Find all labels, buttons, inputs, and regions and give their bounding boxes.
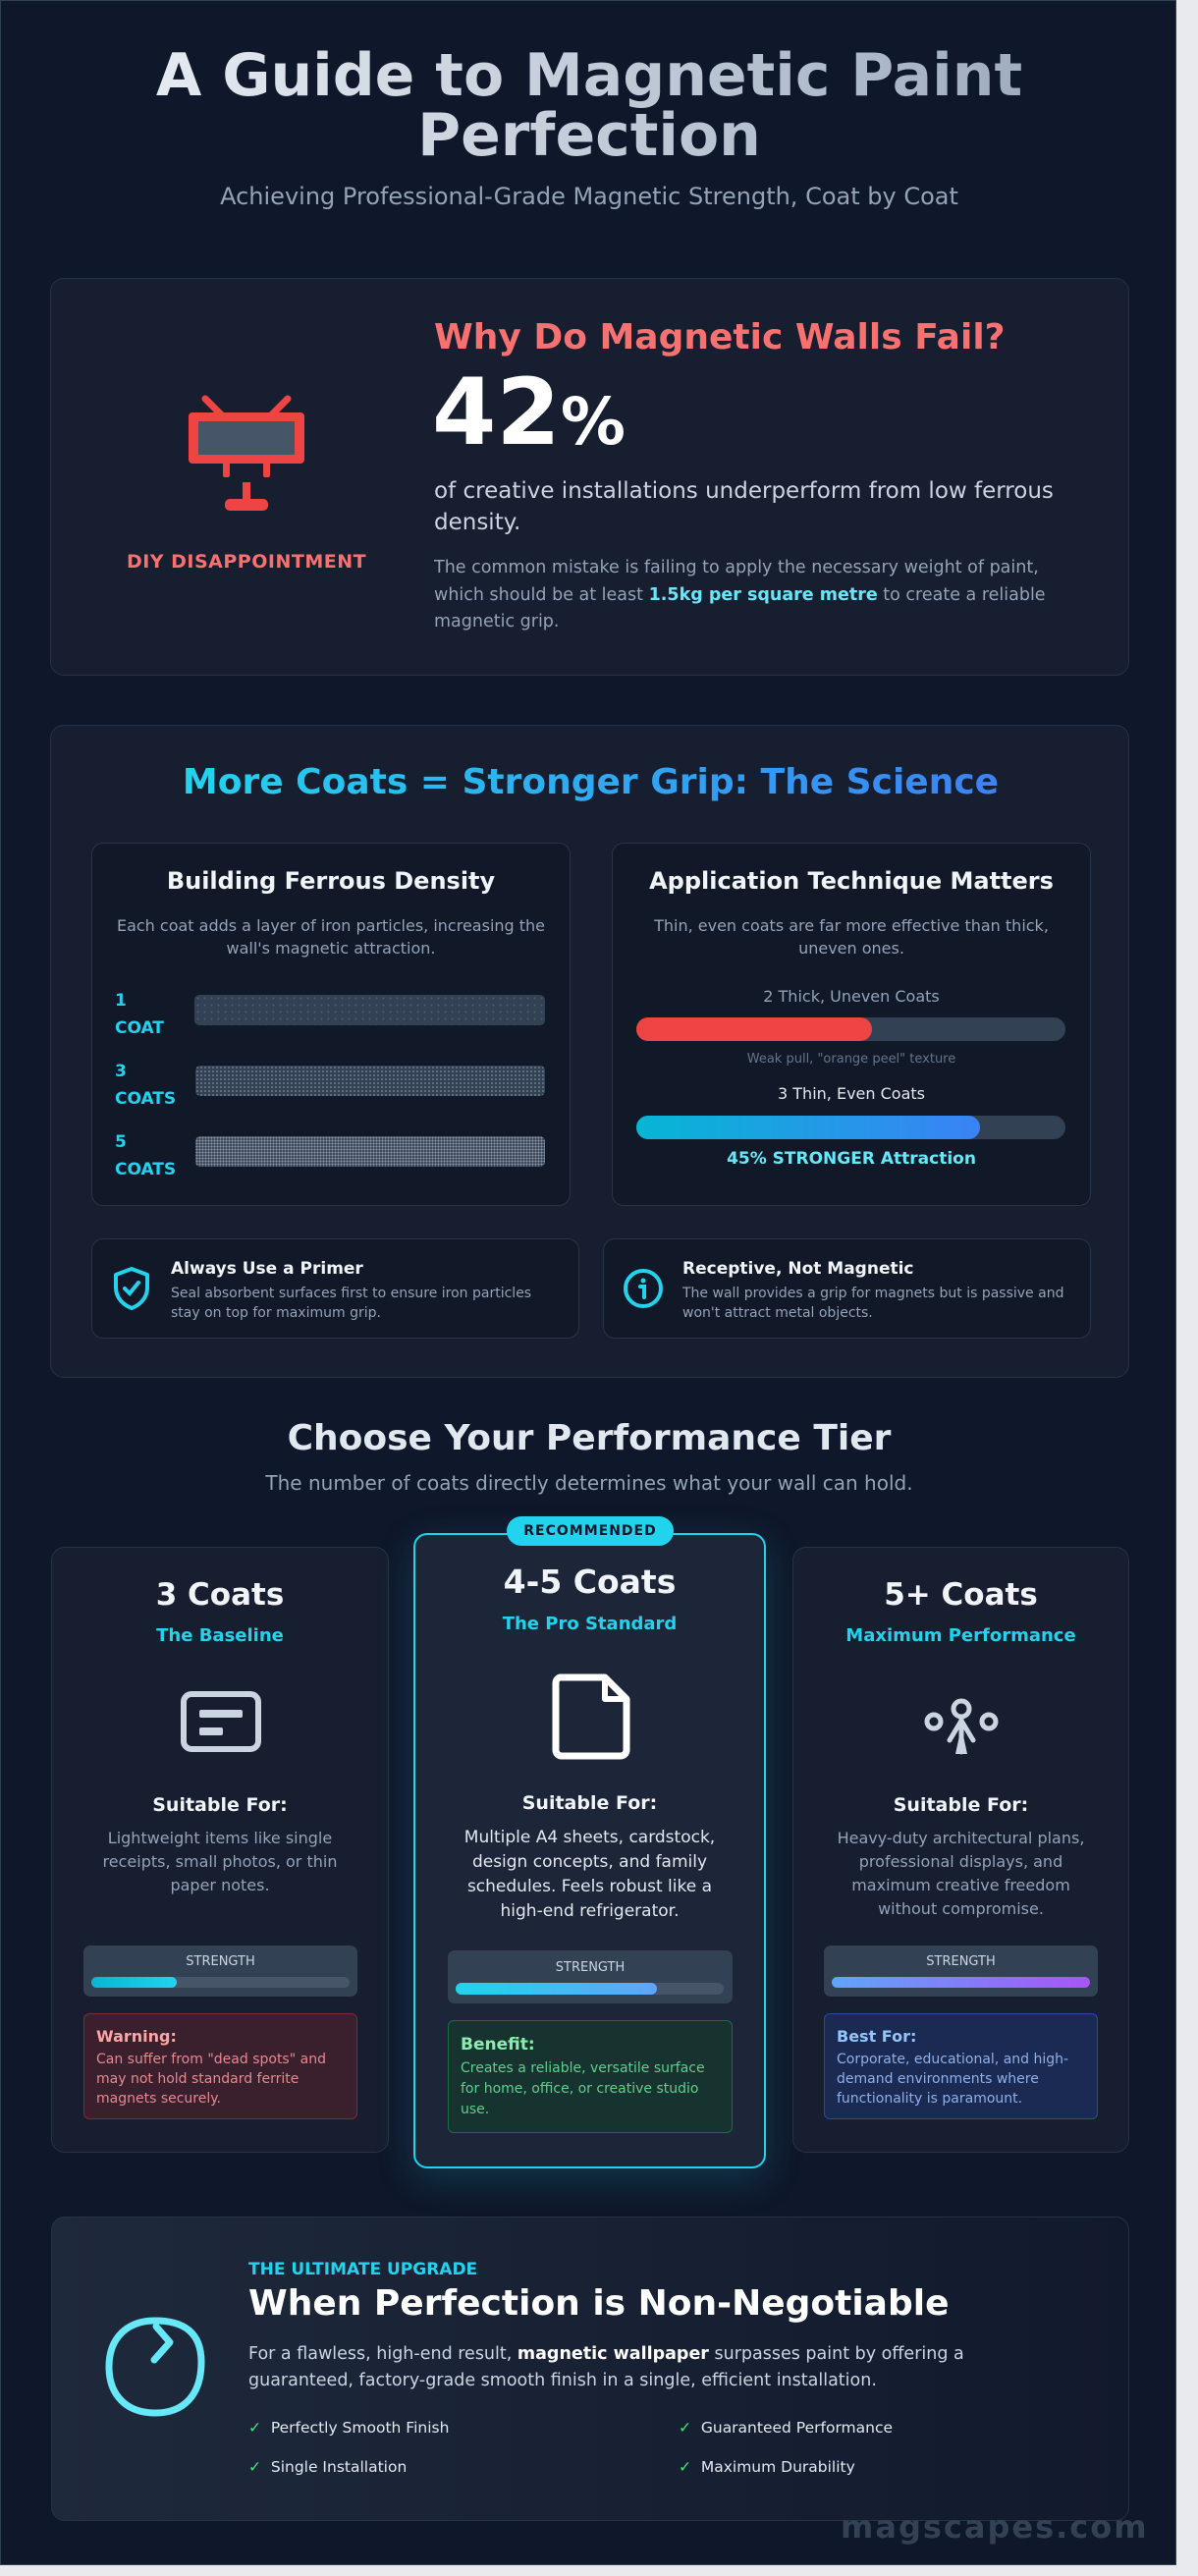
tier card: 3 coats: Lightweight items like single receipts, small photos, or thin paper notes. <box>103 1829 337 1894</box>
card: application technique: Application Technique Matters <box>649 867 1054 895</box>
tier card: 5+ coats: Maximum Performance <box>845 1625 1076 1646</box>
icon: network <box>925 1699 998 1754</box>
icon: timer <box>106 2318 204 2416</box>
row 5 coats: 5 <box>115 1132 127 1152</box>
strength meter <box>824 1946 1098 1997</box>
icon: document <box>552 1673 630 1760</box>
strength meter <box>83 1946 357 1997</box>
tier card: 4-5 coats recommended: Suitable For: <box>522 1792 657 1814</box>
card: building ferrous density: Each coat adds a layer of iron particles, increasing the wall's magnetic attraction. <box>117 916 545 958</box>
tip: primer: Always Use a Primer <box>171 1259 363 1279</box>
tip: primer <box>91 1238 579 1339</box>
icon: broken screen <box>189 395 304 511</box>
subtitle: Achieving Professional-Grade Magnetic Strength, Coat by Coat <box>220 183 958 210</box>
title <box>1 46 1177 166</box>
panel: science <box>50 725 1129 1378</box>
checklist: ✓ Guaranteed Performance <box>679 2419 893 2437</box>
watermark: magscapes.com <box>841 2508 1149 2546</box>
badge: recommended <box>507 1516 674 1546</box>
card: application technique <box>612 843 1091 1206</box>
heading: Why Do Magnetic Walls Fail? <box>434 317 1006 357</box>
benefit box <box>448 2020 733 2133</box>
benefit box: Creates a reliable, versatile surface for home, office, or creative studio use. <box>461 2060 705 2117</box>
row 3 coats <box>115 1062 545 1109</box>
icon: card <box>181 1691 261 1752</box>
panel: why walls fail <box>50 278 1129 676</box>
tier card: 4-5 coats recommended: 4-5 Coats <box>504 1562 676 1601</box>
panel: ultimate upgrade: THE ULTIMATE UPGRADE <box>248 2260 477 2279</box>
best for box <box>824 2013 1098 2119</box>
checklist <box>248 2419 893 2476</box>
benefit box: Benefit: <box>461 2035 535 2055</box>
tier card: 4-5 coats recommended: Multiple A4 sheets, cardstock, design concepts, and family schedules. Feels robust like a high-end refrigerator. <box>464 1828 715 1921</box>
tier card: 3 coats: Suitable For: <box>152 1794 288 1816</box>
stat 42%: 42% <box>432 359 626 466</box>
row 3 coats: 3 <box>115 1062 127 1081</box>
card: application technique: Weak pull, "orange peel" texture <box>747 1052 955 1067</box>
thin coats bar: 3 Thin, Even Coats <box>778 1084 925 1103</box>
thick coats bar: 2 Thick, Uneven Coats <box>763 987 940 1006</box>
best for box: Best For: <box>837 2027 916 2046</box>
row 5 coats <box>115 1132 545 1179</box>
checklist: ✓ Maximum Durability <box>679 2458 855 2476</box>
card: building ferrous density: COATS <box>115 1089 176 1109</box>
strength meter <box>448 1950 733 2003</box>
strength meter: STRENGTH <box>556 1960 625 1975</box>
tip: receptive: The wall provides a grip for magnets but is passive and won't attract metal objects. <box>682 1286 1063 1321</box>
tier card: 4-5 coats recommended <box>413 1533 766 2168</box>
card: building ferrous density <box>91 843 571 1206</box>
row 1 coat <box>115 991 545 1038</box>
best for box: Corporate, educational, and high-demand environments where functionality is paramount. <box>837 2052 1068 2107</box>
card: application technique: Thin, even coats are far more effective than thick, uneven ones. <box>654 916 1049 958</box>
heading: More Coats = Stronger Grip: The Science <box>183 762 999 802</box>
tier card: 3 coats: The Baseline <box>156 1625 284 1646</box>
row 1 coat: 1 <box>115 991 127 1011</box>
strength meter: STRENGTH <box>926 1954 996 1969</box>
warning box <box>83 2013 357 2119</box>
checklist: ✓ Perfectly Smooth Finish <box>248 2419 449 2437</box>
panel: ultimate upgrade: For a flawless, high-end result, magnetic wallpaper surpasses paint by offering a guaranteed, factory-grade smooth finish in a single, efficient installation. <box>248 2344 964 2390</box>
panel: ultimate upgrade <box>51 2217 1129 2521</box>
tier card: 5+ coats: Heavy-duty architectural plans, professional displays, and maximum creative freedom without compromise. <box>838 1829 1084 1918</box>
title: Perfection <box>417 101 761 170</box>
card: building ferrous density: COATS <box>115 1160 176 1179</box>
card: building ferrous density: COAT <box>115 1018 164 1038</box>
strength meter: STRENGTH <box>186 1954 255 1969</box>
tip: receptive: Receptive, Not Magnetic <box>682 1259 914 1279</box>
tier card: 3 coats <box>51 1547 389 2153</box>
warning box: Warning: <box>96 2027 177 2046</box>
tip: receptive <box>603 1238 1091 1339</box>
tier card: 4-5 coats recommended: The Pro Standard <box>503 1614 677 1634</box>
explanation: The common mistake is failing to apply the necessary weight of paint, which should be at least 1.5kg per square metre to create a reliable magnetic grip. <box>434 558 1046 631</box>
section subtitle: The number of coats directly determines what your wall can hold. <box>265 1471 913 1495</box>
warning box: Can suffer from "dead spots" and may not hold standard ferrite magnets securely. <box>96 2052 326 2107</box>
checklist: ✓ Single Installation <box>248 2458 407 2476</box>
tier card: 5+ coats: Suitable For: <box>894 1794 1028 1816</box>
tier card: 5+ coats: 5+ Coats <box>884 1577 1038 1613</box>
tip: primer: Seal absorbent surfaces first to ensure iron particles stay on top for maximum grip. <box>171 1286 531 1321</box>
card: building ferrous density: Building Ferrous Density <box>167 867 495 895</box>
card: application technique: 45% STRONGER Attraction <box>727 1149 976 1169</box>
section heading: tiers: Choose Your Performance Tier <box>288 1418 891 1458</box>
stat text: of creative installations underperform from low ferrous density. <box>434 478 1054 535</box>
title: A Guide to Magnetic Paint <box>156 41 1022 110</box>
panel: ultimate upgrade: When Perfection is Non-Negotiable <box>248 2283 949 2324</box>
badge: recommended: RECOMMENDED <box>523 1523 657 1539</box>
icon label: DIY DISAPPOINTMENT <box>127 551 366 573</box>
tier card: 5+ coats <box>792 1547 1129 2153</box>
tier card: 3 coats: 3 Coats <box>156 1577 284 1613</box>
